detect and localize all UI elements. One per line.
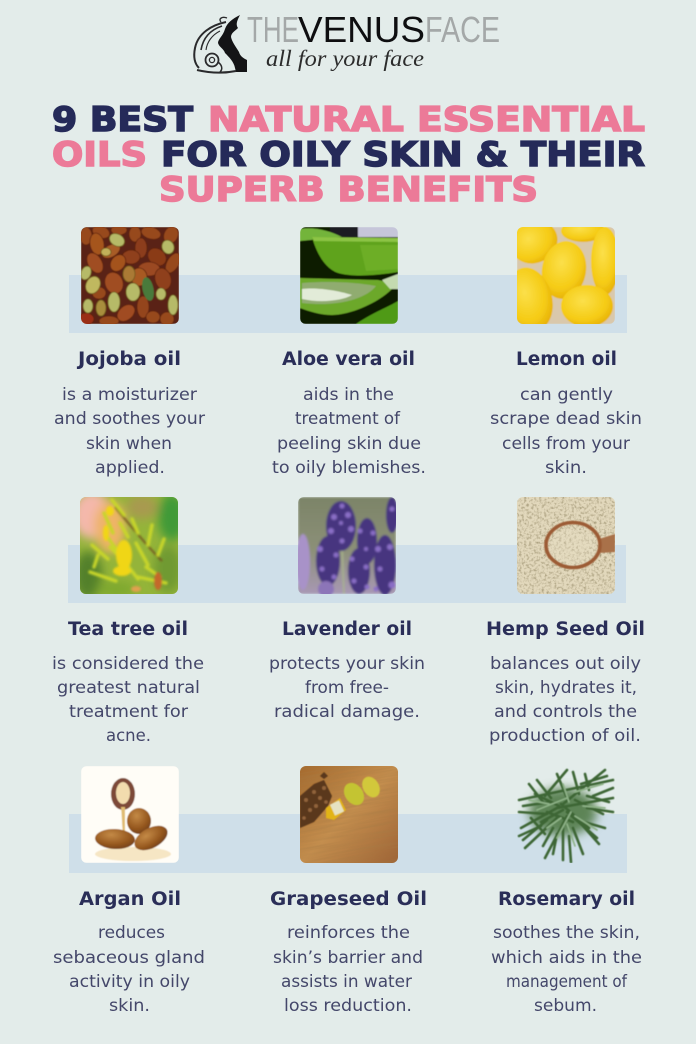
name: Hemp Seed Oil	[486, 619, 645, 640]
photo: aloe vera	[300, 227, 398, 324]
logo: The Venus Face: VENUS	[298, 9, 425, 50]
description	[491, 922, 642, 1015]
description: skin.	[545, 457, 587, 477]
photo: argan nuts	[81, 766, 179, 863]
description: protects your skin	[269, 653, 425, 673]
description	[272, 384, 426, 477]
name: Jojoba oil	[76, 349, 181, 370]
item: Rosemary oil	[491, 889, 642, 1015]
description	[490, 384, 642, 477]
description: balances out oily	[490, 653, 641, 673]
photo: tea tree	[80, 497, 178, 594]
item: Hemp Seed Oil	[486, 619, 645, 745]
description: greatest natural	[57, 677, 200, 697]
item: Aloe vera oil	[272, 349, 426, 477]
description: skin.	[109, 995, 150, 1015]
description: and soothes your	[54, 408, 205, 428]
description: skin’s barrier and	[273, 947, 423, 967]
item: Grapeseed Oil	[270, 889, 427, 1015]
description	[489, 653, 641, 745]
description: reduces	[98, 922, 165, 942]
description: from free-	[305, 677, 389, 697]
photo: grapeseed on wood	[300, 766, 398, 863]
description: applied.	[95, 457, 165, 477]
logo: The Venus Face: FACE	[425, 9, 500, 50]
item: Argan Oil	[53, 889, 205, 1015]
description: peeling skin due	[277, 433, 421, 453]
band: row 1	[69, 275, 627, 333]
description	[269, 653, 425, 721]
item: Lemon oil	[490, 349, 642, 477]
description: assists in water	[281, 971, 412, 991]
description: soothes the skin,	[493, 922, 640, 942]
description	[53, 922, 205, 1015]
description: radical damage.	[274, 701, 420, 721]
name: Aloe vera oil	[282, 349, 415, 370]
description	[54, 384, 205, 477]
name: Lemon oil	[516, 349, 617, 370]
photo: lemons	[517, 227, 615, 324]
description: to oily blemishes.	[272, 457, 426, 477]
item: Jojoba oil	[54, 349, 205, 477]
photo: jojoba seeds	[81, 227, 179, 324]
description: cells from your	[502, 433, 630, 453]
description: loss reduction.	[284, 995, 412, 1015]
title: OILS	[52, 135, 147, 174]
name: Grapeseed Oil	[270, 889, 427, 910]
title: SUPERB BENEFITS	[159, 170, 538, 209]
title: NATURAL ESSENTIAL	[208, 100, 645, 139]
logo: The Venus Face	[194, 9, 500, 73]
photo: lavender	[296, 497, 398, 597]
description: skin when	[86, 433, 172, 453]
name: Tea tree oil	[68, 619, 188, 640]
name: Argan Oil	[79, 889, 181, 910]
description: production of oil.	[489, 725, 641, 745]
tagline: all for your face	[266, 46, 424, 71]
brand wordmark: THE	[247, 9, 299, 50]
title: FOR OILY SKIN & THEIR	[161, 135, 645, 174]
description: treatment of	[295, 408, 401, 428]
description: management of	[506, 971, 628, 991]
description: skin, hydrates it,	[495, 677, 637, 697]
band: row 3	[69, 814, 627, 873]
description: activity in oily	[69, 971, 190, 991]
description: sebum.	[534, 995, 597, 1015]
description: is considered the	[52, 653, 204, 673]
photo: rosemary sprigs	[519, 770, 613, 862]
description: sebaceous gland	[53, 947, 205, 967]
band: row 2	[68, 545, 626, 603]
photo: hemp seed with wooden spoon	[517, 497, 615, 594]
description: and controls the	[494, 701, 637, 721]
title	[52, 100, 645, 209]
item: Lavender oil	[269, 619, 425, 721]
description: aids in the	[303, 384, 394, 404]
description	[273, 922, 423, 1015]
description: treatment for	[69, 701, 188, 721]
description: reinforces the	[287, 922, 410, 942]
item: Tea tree oil	[52, 619, 204, 745]
description: acne.	[106, 725, 151, 745]
name: Rosemary oil	[498, 889, 635, 910]
description: can gently	[520, 384, 613, 404]
icon: face silhouette with curling hair	[194, 15, 247, 73]
description: is a moisturizer	[62, 384, 197, 404]
title: 9 BEST	[52, 100, 193, 139]
description: which aids in the	[491, 947, 642, 967]
name: Lavender oil	[282, 619, 412, 640]
description	[52, 653, 204, 745]
description: scrape dead skin	[490, 408, 642, 428]
